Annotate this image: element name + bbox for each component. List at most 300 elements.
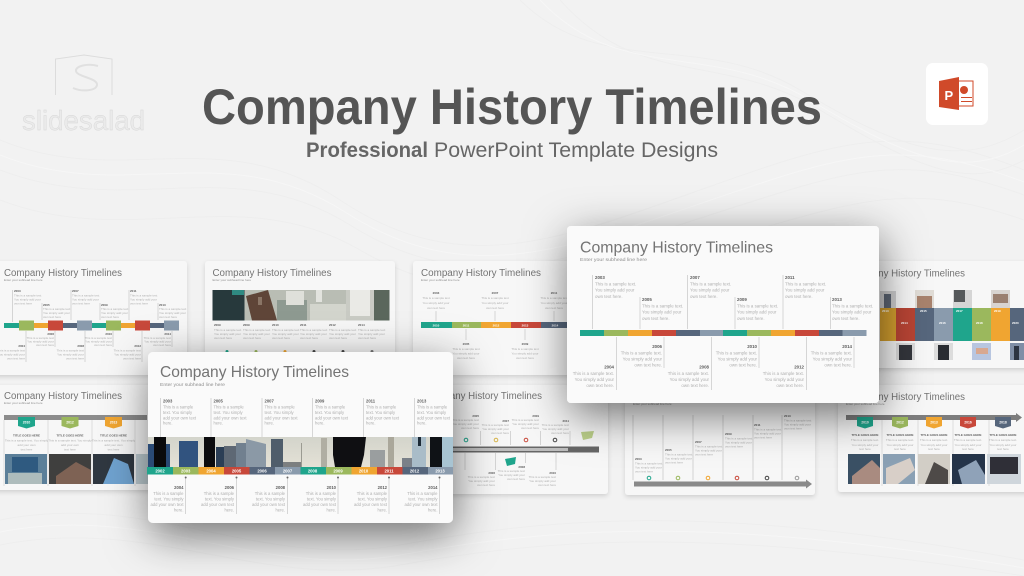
top entries: This is a sample text. bbox=[785, 282, 826, 286]
bottom entries: text. You simply bbox=[358, 496, 388, 502]
panel: slide 8 tabs with photos right: Enter your subhead line here bbox=[846, 402, 885, 406]
bottom entries: 2010 bbox=[327, 485, 337, 490]
entries: 2005 bbox=[665, 448, 672, 452]
columns: This is a sample text bbox=[214, 328, 242, 332]
bottom entries: add your own text bbox=[201, 502, 235, 507]
top entries: You simply add your bbox=[785, 288, 825, 292]
entries: own text here bbox=[665, 460, 683, 464]
columns bbox=[214, 323, 386, 340]
entries: 2008 bbox=[518, 465, 525, 469]
top entries: 2003 bbox=[595, 275, 605, 280]
colour columns: 2015 bbox=[920, 309, 927, 313]
entries: This is a sample text bbox=[784, 418, 812, 422]
top entries: here. bbox=[264, 420, 274, 426]
title: Company History Timelines bbox=[202, 79, 822, 135]
top entries bbox=[163, 398, 451, 426]
bottom entries: 2012 bbox=[378, 485, 388, 490]
entries: 2011 bbox=[551, 291, 558, 295]
top entries: text. You simply bbox=[264, 410, 295, 415]
tab text: TITLE GOES HERE bbox=[954, 433, 982, 437]
panel: slide 3 simple timeline: Enter your subhead line here bbox=[421, 278, 460, 282]
top entries: own text here bbox=[159, 315, 177, 319]
colour columns: 2016 bbox=[939, 321, 946, 325]
panel: main featured slide with skyline bbox=[147, 352, 453, 523]
year tabs bbox=[857, 417, 1011, 428]
entries: 2007 bbox=[492, 291, 499, 295]
colour strip with years: 2011 bbox=[384, 468, 394, 474]
bottom entries bbox=[573, 344, 853, 388]
photos bbox=[848, 454, 1021, 484]
bottom entries: add your own text bbox=[404, 502, 438, 507]
bottom entries bbox=[150, 485, 438, 512]
bottom entries: This is a sample text. bbox=[716, 350, 757, 356]
entries: You simply add your bbox=[468, 479, 495, 483]
top entries: here. bbox=[417, 420, 427, 426]
entries: 2010 bbox=[549, 471, 556, 475]
entries: This is a sample text bbox=[452, 347, 480, 351]
colour columns bbox=[880, 308, 1024, 341]
columns: You simply add your bbox=[329, 332, 356, 336]
bottom entries: You simply add your bbox=[85, 340, 112, 344]
bottom entries: text. You simply bbox=[154, 496, 184, 502]
photo: aerial city bbox=[212, 290, 390, 320]
slide heading: Company History Timelines bbox=[580, 240, 773, 256]
bottom entries: 2008 bbox=[77, 344, 84, 348]
tab text: This is a sample text. You simply bbox=[92, 438, 136, 442]
year tabs: 2010 bbox=[861, 420, 869, 424]
bottom entries: here. bbox=[275, 508, 285, 512]
bottom entries: You simply add your bbox=[718, 356, 758, 362]
columns: You simply add your bbox=[272, 332, 299, 336]
pin dots bbox=[226, 350, 374, 353]
top entries: This is a sample text. bbox=[832, 304, 873, 308]
entries: 2013 bbox=[784, 414, 791, 418]
colour strip with years: 2013 bbox=[435, 468, 445, 474]
entries: 2011 bbox=[562, 419, 569, 423]
entries: own text here bbox=[486, 306, 504, 310]
tab text: You simply add your bbox=[990, 443, 1016, 447]
bottom entries: here. bbox=[326, 508, 336, 512]
timeline bar bbox=[4, 320, 179, 330]
bottom entries: 2006 bbox=[225, 485, 235, 490]
colour strip with years: 2009 bbox=[333, 468, 343, 474]
top entries: text. You simply bbox=[163, 410, 193, 415]
panel: slide 2 photo banner bbox=[205, 261, 395, 375]
colour columns: 2020 bbox=[1012, 321, 1019, 325]
entries: own text here bbox=[507, 477, 525, 481]
panel: slide 6 flag timeline bbox=[420, 385, 608, 494]
colour columns: 2019 bbox=[994, 309, 1001, 313]
columns: own text here bbox=[214, 336, 232, 340]
timeline bar: 2010 bbox=[433, 323, 440, 327]
bottom entries: 2014 bbox=[164, 332, 171, 336]
photos above and below bbox=[880, 290, 1024, 360]
top entries: This is a sample text. bbox=[737, 304, 778, 308]
entries: own text here bbox=[427, 306, 445, 310]
panel: slide 5 tabs with photos left: Enter your subhead line here bbox=[4, 401, 43, 405]
tab text: text here bbox=[894, 447, 906, 451]
bottom entries: text. You simply bbox=[256, 496, 286, 502]
tab text: add your own bbox=[61, 443, 79, 447]
tab text: text here bbox=[859, 447, 871, 451]
entries: own text here bbox=[457, 356, 475, 360]
columns: This is a sample text bbox=[358, 328, 386, 332]
year tabs: 2018 bbox=[999, 420, 1007, 424]
entries: This is a sample text bbox=[422, 296, 450, 300]
entries: 2011 bbox=[754, 423, 761, 427]
bottom entries: You simply add your bbox=[27, 340, 54, 344]
columns: own text here bbox=[243, 336, 261, 340]
panel: slide 1 alternating timeline: Company History Timelines bbox=[4, 268, 122, 279]
arrow bar bbox=[846, 413, 1022, 422]
entries: This is a sample text bbox=[635, 462, 663, 466]
slide heading: Company History Timelines bbox=[160, 364, 349, 381]
bottom entries: This is a sample text. bbox=[668, 371, 709, 376]
top entries: You simply add your bbox=[130, 298, 157, 302]
stems bbox=[593, 275, 854, 390]
top entries: own text here. bbox=[737, 316, 765, 321]
top entries: This is a sample bbox=[163, 404, 194, 410]
entries: own text here bbox=[461, 426, 479, 430]
bottom entries bbox=[0, 332, 171, 360]
columns: You simply add your bbox=[243, 332, 270, 336]
slide subhead: Enter your subhead line here bbox=[160, 382, 225, 388]
columns: 2010 bbox=[272, 323, 279, 327]
entries: This is a sample text bbox=[542, 423, 569, 427]
icon: PowerPoint: P bbox=[944, 88, 954, 103]
entries: own text here bbox=[695, 452, 713, 456]
tab text: You simply add your bbox=[852, 443, 878, 447]
bottom entries: This is a sample text. bbox=[573, 371, 614, 376]
entries: You simply add your bbox=[423, 301, 449, 305]
timeline stems bbox=[12, 290, 172, 362]
top entries: 2007 bbox=[72, 289, 79, 293]
bottom entries: This is a sample bbox=[306, 491, 337, 496]
colour strip with years: 2008 bbox=[308, 468, 318, 474]
top entries: This is a sample text bbox=[43, 307, 71, 311]
timeline bar: 2014 bbox=[552, 323, 559, 327]
timeline bar bbox=[453, 446, 599, 452]
tab text: TITLE GOES HERE bbox=[13, 434, 40, 438]
top entries: This is a sample bbox=[366, 404, 397, 410]
top entries: This is a sample text. bbox=[595, 282, 636, 286]
top entries: here. bbox=[366, 420, 376, 426]
top entries: 2011 bbox=[130, 289, 137, 293]
top entries: own text here bbox=[43, 315, 61, 319]
top entries: text. You simply bbox=[315, 410, 345, 415]
entries: own text here bbox=[725, 444, 743, 448]
top entries: own text here. bbox=[595, 294, 623, 299]
entries: You simply add your bbox=[695, 448, 722, 452]
arrow bbox=[634, 480, 812, 488]
top entries: This is a sample text bbox=[72, 294, 100, 298]
top entries: 2003 bbox=[14, 289, 21, 293]
top entries: text. You simply bbox=[417, 410, 447, 415]
top entries: own text here. bbox=[785, 294, 813, 299]
entries: own text here bbox=[491, 431, 509, 435]
top entries: This is a sample bbox=[264, 404, 295, 410]
tab text: This is a sample text. You simply bbox=[48, 438, 92, 442]
panel: featured slide with colour bar bbox=[567, 226, 879, 403]
top entries: 2011 bbox=[785, 275, 795, 280]
columns: 2009 bbox=[243, 323, 250, 327]
entries bbox=[452, 414, 569, 487]
top entries: add your own text bbox=[417, 416, 451, 420]
bottom entries: own text here. bbox=[634, 362, 662, 368]
bottom entries: This is a sample bbox=[407, 491, 438, 496]
bottom entries: You simply add your bbox=[813, 356, 853, 362]
entries: You simply add your bbox=[635, 466, 662, 470]
bottom entries: This is a sample text bbox=[85, 336, 112, 340]
entries: This is a sample text bbox=[529, 475, 556, 479]
panel: slide 6 flag timeline: Company History Timelines bbox=[424, 391, 542, 402]
columns: own text here bbox=[272, 336, 290, 340]
tab text: text here bbox=[962, 447, 974, 451]
flags bbox=[505, 431, 594, 466]
entries: You simply add your bbox=[512, 352, 538, 356]
top entries: own text here bbox=[130, 302, 148, 306]
columns: You simply add your bbox=[358, 332, 385, 336]
top entries: This is a sample text bbox=[101, 307, 129, 311]
panel: slide 4 colour columns with photos: Company History Timelines bbox=[847, 268, 965, 280]
tab text: TITLE GOES HERE bbox=[886, 433, 914, 437]
bottom entries: here. bbox=[377, 508, 387, 512]
logo icon bbox=[56, 55, 112, 95]
entries: 2003 bbox=[433, 291, 440, 295]
entries: This is a sample text bbox=[540, 296, 568, 300]
timeline bar: 2012 bbox=[493, 323, 500, 327]
entries: 2005 bbox=[463, 342, 470, 346]
bottom entries: This is a sample text. bbox=[763, 371, 804, 376]
stem dots bbox=[185, 476, 440, 478]
entries: 2005 bbox=[472, 414, 479, 418]
top entries: You simply add your bbox=[642, 310, 682, 314]
tab text: This is a sample text. bbox=[954, 438, 982, 442]
top entries: 2005 bbox=[642, 297, 652, 302]
top entries: here. bbox=[315, 420, 325, 426]
subtitle: PowerPoint Template Designs bbox=[434, 138, 718, 162]
bottom entries: here. bbox=[224, 508, 234, 512]
top entries: add your own text bbox=[163, 416, 197, 420]
bottom entries: add your own text bbox=[252, 502, 286, 507]
bottom entries: 2012 bbox=[134, 344, 141, 348]
columns: own text here bbox=[329, 336, 347, 340]
bottom entries: 2008 bbox=[276, 485, 286, 490]
top entries: text. You simply bbox=[214, 410, 244, 415]
tab text bbox=[851, 433, 1017, 451]
timeline bar: 2011 bbox=[463, 323, 470, 327]
top entries: This is a sample text bbox=[14, 294, 42, 298]
bottom entries: 2004 bbox=[18, 344, 25, 348]
colour columns: 2018 bbox=[976, 321, 983, 325]
top entries: This is a sample bbox=[315, 404, 346, 410]
bottom entries: 2004 bbox=[174, 485, 184, 490]
columns: 2011 bbox=[300, 323, 307, 327]
bottom entries: 2006 bbox=[652, 344, 663, 349]
tab text: TITLE GOES HERE bbox=[100, 434, 127, 438]
top entries: You simply add your bbox=[595, 288, 635, 292]
top entries bbox=[14, 289, 187, 319]
logo: slidesalad bbox=[22, 55, 145, 136]
top entries: 2013 bbox=[159, 303, 166, 307]
entries: own text here bbox=[477, 483, 495, 487]
top entries: own text here bbox=[101, 315, 119, 319]
top entries: You simply add your bbox=[832, 310, 872, 314]
columns: You simply add your bbox=[300, 332, 327, 336]
top entries: 2005 bbox=[214, 398, 223, 404]
entries: 2009 bbox=[725, 432, 732, 436]
columns: 2009 bbox=[214, 323, 221, 327]
bottom entries: You simply add your bbox=[144, 340, 171, 344]
entries: This is a sample text bbox=[481, 296, 509, 300]
bottom entries: own text here. bbox=[824, 362, 852, 368]
bottom entries: add your own text bbox=[150, 502, 184, 507]
tab text: text here bbox=[21, 448, 33, 452]
entries: This is a sample text bbox=[498, 469, 525, 473]
colour columns: 2014 bbox=[901, 321, 908, 325]
entries: own text here bbox=[784, 426, 802, 430]
entries bbox=[635, 414, 812, 474]
entries: 2003 bbox=[635, 457, 642, 461]
tab text: You simply add your bbox=[921, 443, 947, 447]
entries: own text here bbox=[545, 306, 563, 310]
entries: You simply add your bbox=[482, 301, 508, 305]
bottom entries: You simply add your bbox=[670, 377, 710, 382]
top entries: here. bbox=[163, 420, 173, 426]
bottom entries: add your own text bbox=[354, 502, 388, 507]
tab text: This is a sample text. You simply bbox=[5, 438, 49, 442]
top entries: You simply add your bbox=[737, 310, 777, 314]
panel: slide 2 photo banner: Company History Timelines bbox=[212, 268, 332, 279]
timeline bar bbox=[421, 322, 571, 328]
entries: 2009 bbox=[522, 342, 529, 346]
bottom entries: own text here bbox=[123, 356, 141, 360]
entries: You simply add your bbox=[754, 432, 781, 436]
entries: own text here bbox=[521, 426, 539, 430]
top entries: This is a sample text. bbox=[690, 282, 731, 286]
bottom entries: This is a sample text. bbox=[621, 350, 662, 356]
year tabs: 2012 bbox=[66, 420, 74, 424]
panel: slide 7 stepped arrow timeline bbox=[625, 395, 815, 495]
entries: This is a sample text bbox=[754, 428, 782, 432]
columns: 2014 bbox=[358, 323, 365, 327]
tab text: TITLE GOES HERE bbox=[56, 434, 84, 438]
top entries: here. bbox=[214, 420, 223, 426]
top stems bbox=[160, 398, 414, 437]
top entries: This is a sample bbox=[417, 404, 448, 410]
panel: slide 1 alternating timeline bbox=[0, 261, 187, 375]
top entries: You simply add your bbox=[101, 311, 128, 315]
timeline bar: 2013 bbox=[522, 323, 529, 327]
colour columns: 2017 bbox=[956, 309, 963, 313]
panel: slide 4 colour columns with photos bbox=[840, 261, 1024, 368]
top entries: This is a sample text bbox=[130, 294, 158, 298]
top entries: 2011 bbox=[366, 398, 376, 404]
tab text: This is a sample text. bbox=[920, 438, 948, 442]
columns: You simply add your bbox=[214, 332, 241, 336]
entries: own text here bbox=[516, 356, 534, 360]
top entries: You simply add your bbox=[43, 311, 70, 315]
entries: own text here bbox=[538, 483, 556, 487]
panel: slide 5 tabs with photos left bbox=[0, 385, 153, 490]
bottom entries: You simply add your bbox=[623, 356, 663, 362]
panel: slide 7 stepped arrow timeline: Enter your subhead line here bbox=[633, 402, 672, 406]
bottom entries: This is a sample bbox=[255, 491, 286, 496]
tab text: TITLE GOES HERE bbox=[851, 433, 879, 437]
entries: This is a sample text bbox=[512, 418, 539, 422]
columns: own text here bbox=[358, 336, 376, 340]
top entries: This is a sample text bbox=[159, 307, 187, 311]
top entries: 2007 bbox=[264, 398, 274, 404]
bottom entries: own text here bbox=[66, 356, 84, 360]
tab text: text here bbox=[928, 447, 940, 451]
columns: This is a sample text bbox=[300, 328, 328, 332]
entries: 2007 bbox=[502, 419, 509, 423]
top entries: add your own text bbox=[214, 416, 247, 420]
colour strip with years: 2006 bbox=[257, 468, 267, 474]
panel: slide 2 photo banner: Enter your subhead line here bbox=[212, 278, 251, 282]
bottom entries: 2012 bbox=[794, 364, 805, 370]
bottom entries: This is a sample bbox=[357, 491, 388, 496]
top entries: own text here. bbox=[642, 316, 670, 321]
bottom entries: 2008 bbox=[699, 364, 710, 370]
tab text: TITLE GOES HERE bbox=[989, 433, 1017, 437]
map pins bbox=[464, 438, 557, 442]
bottom entries: 2014 bbox=[428, 485, 438, 490]
bottom entries: You simply add your bbox=[57, 352, 84, 356]
bottom entries: You simply add your bbox=[575, 377, 615, 382]
year tabs: 2012 bbox=[896, 420, 904, 424]
top entries: own text here. bbox=[832, 316, 860, 321]
bottom entries: 2014 bbox=[842, 344, 853, 349]
colour strip with years: 2005 bbox=[232, 468, 242, 474]
top entries: You simply add your bbox=[14, 298, 41, 302]
bottom entries: own text here. bbox=[586, 383, 614, 388]
entries: This is a sample text bbox=[665, 452, 693, 456]
entries: You simply add your bbox=[529, 479, 556, 483]
bottom entries: own text here. bbox=[681, 383, 709, 388]
panel: slide 3 simple timeline bbox=[413, 261, 603, 375]
columns: own text here bbox=[300, 336, 318, 340]
entries: You simply add your bbox=[665, 456, 692, 460]
colour columns: 2013 bbox=[882, 309, 889, 313]
year tabs: 2013 bbox=[930, 420, 938, 424]
entries: own text here bbox=[551, 431, 569, 435]
entries: 2006 bbox=[488, 471, 495, 475]
entries: own text here bbox=[635, 470, 653, 474]
entries: You simply add your bbox=[541, 301, 567, 305]
tab text: This is a sample text. bbox=[851, 438, 879, 442]
top entries: 2009 bbox=[101, 303, 108, 307]
bottom entries: text. You simply bbox=[205, 496, 235, 502]
tab text: text here bbox=[64, 448, 76, 452]
entries: You simply add your bbox=[725, 440, 752, 444]
entries: This is a sample text bbox=[725, 436, 753, 440]
icon: PowerPoint bbox=[926, 63, 988, 125]
tab text: You simply add your bbox=[887, 443, 913, 447]
bottom entries: here. bbox=[428, 508, 438, 512]
entries: This is a sample text bbox=[695, 444, 723, 448]
bottom entries: This is a sample text bbox=[57, 348, 84, 352]
bottom entries: text. You simply bbox=[408, 496, 438, 502]
bottom entries: You simply add your bbox=[765, 377, 805, 382]
top entries: 2007 bbox=[690, 275, 700, 280]
tab text: text here bbox=[997, 447, 1009, 451]
top entries: 2009 bbox=[315, 398, 325, 404]
bottom entries: 2010 bbox=[747, 344, 758, 349]
bottom entries: own text here. bbox=[729, 362, 757, 368]
tab text: add your own bbox=[17, 443, 36, 447]
